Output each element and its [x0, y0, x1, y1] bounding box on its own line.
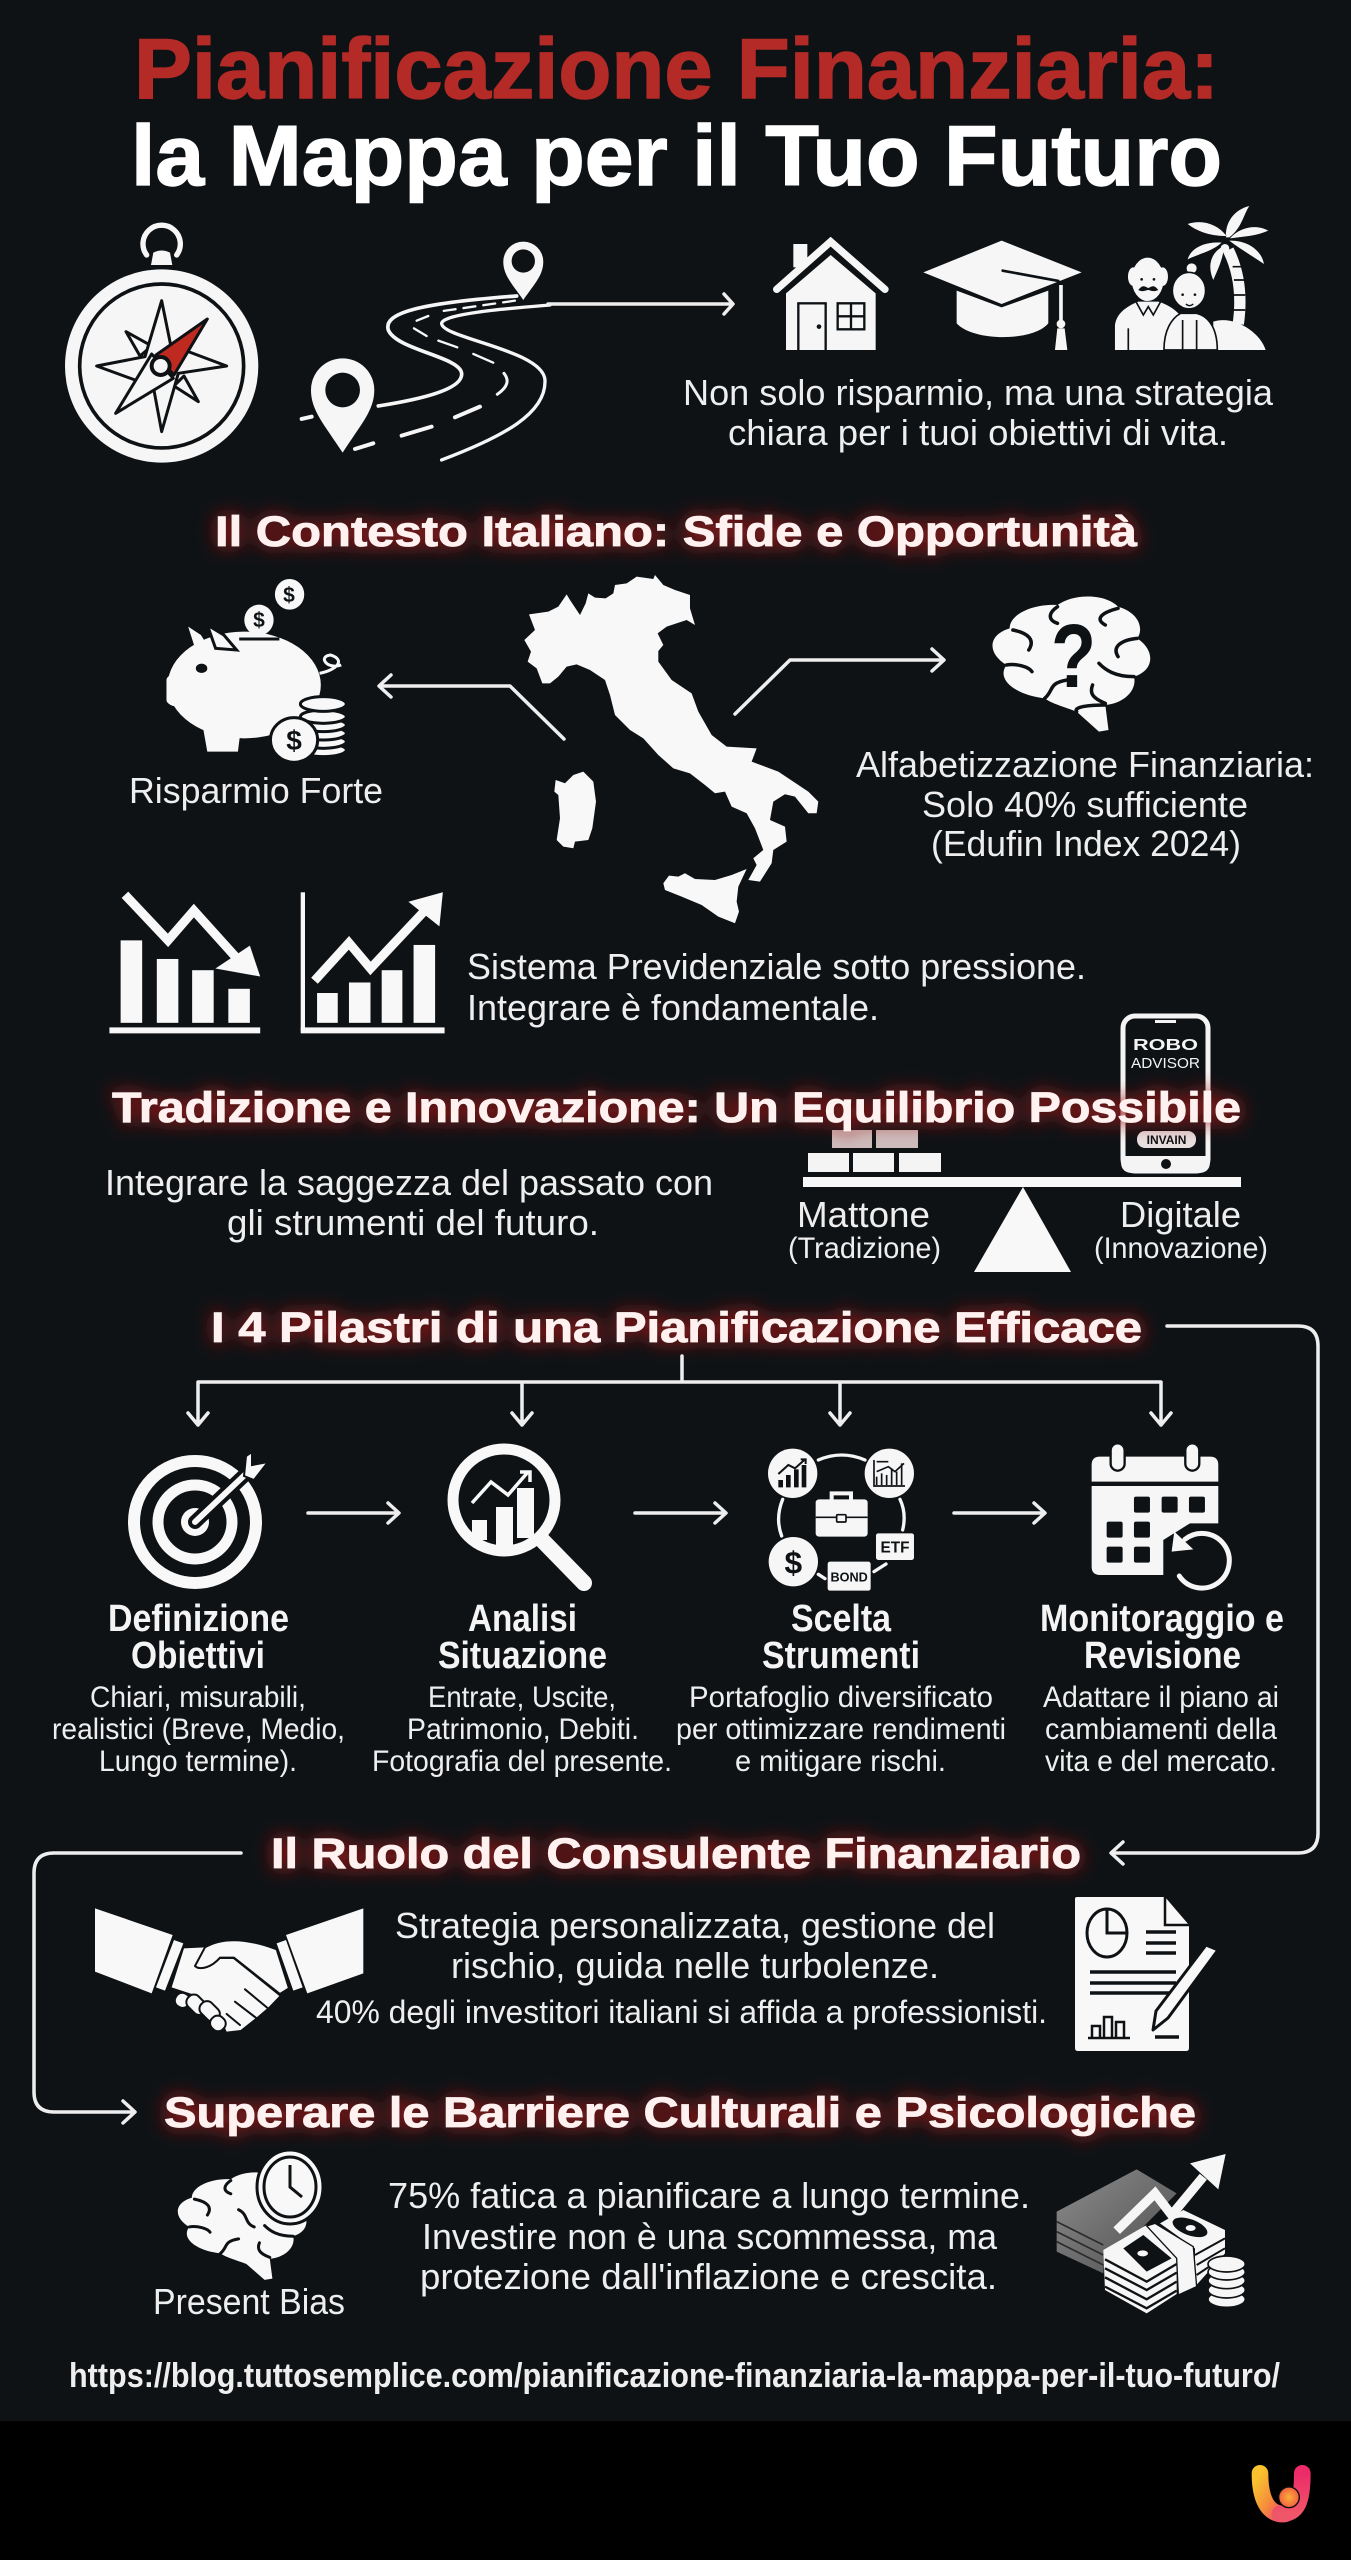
logo [1260, 2473, 1302, 2514]
icon: bricks on scale [808, 1130, 941, 1172]
pillar 3 text [676, 1598, 1006, 1778]
icon: compass [65, 225, 258, 463]
pillar 3 text: per ottimizzare rendimenti [676, 1713, 1006, 1746]
pillar 3 text: Portafoglio diversificato [689, 1681, 993, 1714]
pillar 4 text: cambiamenti della [1045, 1713, 1277, 1746]
title: la Mappa per il Tuo Futuro [131, 109, 1222, 204]
barriers text [388, 2175, 1030, 2297]
pension system text: Sistema Previdenziale sotto pressione. [467, 946, 1086, 987]
pillar 2 text: Fotografia del presente. [372, 1745, 672, 1778]
barriers text: Investire non è una scommessa, ma [422, 2216, 998, 2257]
arrow: Italy to financial literacy [735, 649, 944, 714]
icon: falling bar chart [109, 895, 260, 1033]
pillar 1 text [52, 1598, 345, 1778]
arrow: consulente to barriere [34, 1853, 241, 2123]
heading: contesto italiano: Il Contesto Italiano: Sfide e Opportunità [215, 508, 1138, 556]
pillar 2 text: Situazione [438, 1635, 607, 1677]
consultant text: Strategia personalizzata, gestione del [395, 1905, 995, 1946]
scale labels: Digitale [1120, 1194, 1241, 1235]
financial literacy text [856, 744, 1314, 864]
scale labels: Mattone [797, 1194, 930, 1235]
pillar 4 text: Revisione [1084, 1635, 1241, 1677]
icon: robo advisor phone: INVAIN [1147, 1133, 1186, 1147]
icon: robo advisor phone: ROBO [1133, 1037, 1198, 1054]
scale labels [788, 1194, 1268, 1265]
pillar 1 text: realistici (Breve, Medio, [52, 1713, 345, 1746]
pension system text: Integrare è fondamentale. [467, 987, 879, 1028]
intro text: Non solo risparmio, ma una strategia [683, 372, 1274, 413]
financial literacy text: (Edufin Index 2024) [931, 823, 1241, 864]
icon: money stacks with rising arrow [1057, 2154, 1245, 2313]
pillar 1 text: Lungo termine). [99, 1745, 297, 1778]
pillar 4 text: Adattare il piano ai [1043, 1681, 1279, 1714]
pension system text [467, 946, 1086, 1028]
icon: graduation cap [923, 241, 1082, 350]
icon: rising bar chart [301, 892, 445, 1033]
heading: ruolo del consulente: Il Ruolo del Consulente Finanziario [271, 1830, 1081, 1878]
financial literacy text: Alfabetizzazione Finanziaria: [856, 744, 1314, 785]
heading: tradizione e innovazione: Tradizione e Innovazione: Un Equilibrio Possibile [112, 1084, 1241, 1132]
arrow: Italy to savings [379, 675, 564, 739]
pillar 2 text: Patrimonio, Debiti. [407, 1713, 639, 1746]
icon: piggy bank with coins: $ [286, 725, 302, 756]
icon: target with arrow [134, 1452, 268, 1583]
heading: 4 pilastri: I 4 Pilastri di una Pianificazione Efficace [211, 1304, 1142, 1352]
intro text [683, 372, 1274, 453]
barriers text: 75% fatica a pianificare a lungo termine. [388, 2175, 1030, 2216]
map of Italy [524, 575, 818, 923]
icon: portfolio instruments [768, 1449, 914, 1591]
consultant text: 40% degli investitori italiani si affida a professionisti. [316, 1994, 1047, 2030]
pillar 3 text: Scelta [791, 1598, 892, 1640]
pillar 2 text [372, 1598, 672, 1778]
pillar 4 text: vita e del mercato. [1045, 1745, 1277, 1778]
intro text: chiara per i tuoi obiettivi di vita. [728, 412, 1228, 453]
consultant text [316, 1905, 1047, 2030]
tradition and innovation text: gli strumenti del futuro. [227, 1202, 599, 1243]
heading: superare le barriere: Superare le Barriere Culturali e Psicologiche [164, 2089, 1196, 2137]
icon: winding road with location pins [302, 242, 550, 460]
icon: piggy bank with coins [166, 579, 346, 762]
icon: robo advisor phone [1121, 1016, 1210, 1173]
icon: magnifying glass with chart [453, 1449, 584, 1583]
icon: robo advisor phone: ADVISOR [1131, 1055, 1200, 1072]
icon: handshake [95, 1908, 363, 2034]
icon: calendar with refresh [1092, 1443, 1229, 1588]
pillar 1 text: Obiettivi [131, 1635, 265, 1677]
icon: house [777, 242, 885, 352]
arrows: tree to four pillars [188, 1356, 1171, 1425]
label: risparmio forte: Risparmio Forte [129, 770, 383, 811]
title: Pianificazione Finanziaria: [134, 22, 1219, 117]
pillar 4 text: Monitoraggio e [1040, 1598, 1284, 1640]
icon: piggy bank with coins: $ [253, 609, 265, 632]
arrow: road to goals [548, 294, 733, 314]
icon: portfolio instruments: $ [785, 1544, 803, 1580]
scale labels: (Innovazione) [1094, 1232, 1268, 1265]
pillar 3 text: e mitigare rischi. [735, 1745, 946, 1778]
balance scale [803, 1177, 1241, 1272]
icon: document and pen [1075, 1897, 1218, 2051]
icon: retired couple under palm tree [1115, 206, 1268, 350]
icon: piggy bank with coins: $ [283, 584, 295, 607]
consultant text: rischio, guida nelle turbolenze. [451, 1945, 939, 1986]
label: present bias: Present Bias [153, 2281, 345, 2322]
icon: portfolio instruments: ETF [881, 1540, 909, 1557]
tradition and innovation text [105, 1162, 713, 1243]
icon: portfolio instruments: BOND [830, 1570, 868, 1584]
scale labels: (Tradizione) [788, 1232, 941, 1265]
icon: brain with question mark [992, 596, 1150, 732]
pillar 3 text: Strumenti [762, 1635, 920, 1677]
icon: brain with question mark: ? [1051, 607, 1096, 707]
black footer band [0, 2421, 1351, 2560]
barriers text: protezione dall'inflazione e crescita. [420, 2256, 997, 2297]
tradition and innovation text: Integrare la saggezza del passato con [105, 1162, 713, 1203]
icon: brain with clock [178, 2150, 323, 2280]
arrow: pilastri to consulente [1111, 1326, 1318, 1864]
pillar 1 text: Definizione [108, 1598, 289, 1640]
pillar 1 text: Chiari, misurabili, [90, 1681, 306, 1714]
pillar 2 text: Entrate, Uscite, [428, 1681, 616, 1714]
arrows: between pillars [308, 1503, 1045, 1523]
pillar 4 text [1040, 1598, 1284, 1778]
pillar 2 text: Analisi [468, 1598, 577, 1640]
financial literacy text: Solo 40% sufficiente [922, 784, 1248, 825]
title [131, 22, 1222, 204]
